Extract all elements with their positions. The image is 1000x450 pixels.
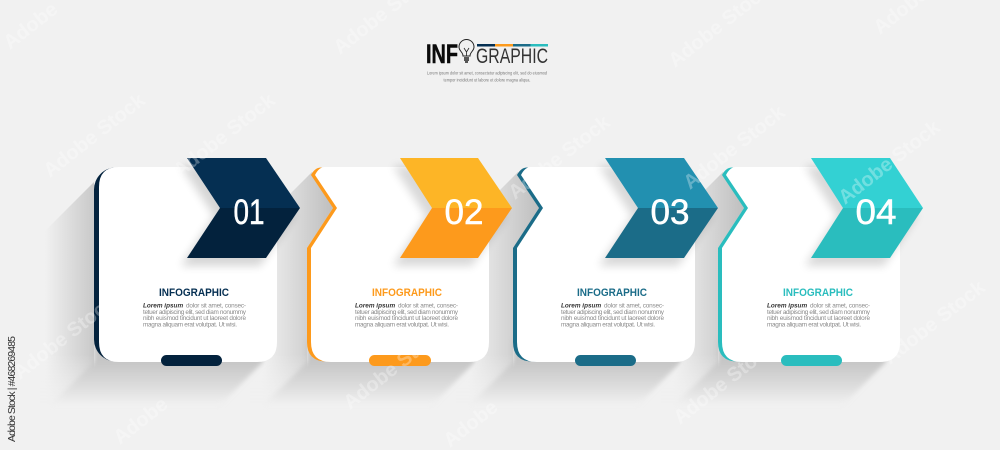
title word INF: INF <box>426 39 458 69</box>
panel: step 04 <box>718 158 923 366</box>
body text: dolor sit amet, consec- <box>398 302 458 310</box>
arrow shadow <box>393 166 506 266</box>
body text: Lorem ipsum <box>561 302 601 310</box>
body text: dolor sit amet, consec- <box>604 302 664 310</box>
body text: tetuer adipiscing elit, sed diam nonummy <box>355 309 459 316</box>
panel: step 01 <box>94 158 300 366</box>
stock watermarks: Adobe Stock <box>880 276 990 369</box>
arrow: 04 <box>811 158 923 258</box>
arrow: 01: 01 <box>234 193 264 232</box>
stock watermarks: Adobe Stock <box>680 101 790 194</box>
card accent edge <box>513 168 582 362</box>
body text: dolor sit amet, consec- <box>810 302 870 310</box>
four colour title bar <box>477 44 548 46</box>
arrow: 02 <box>400 158 512 258</box>
stock watermarks: Adobe Stock <box>835 116 945 209</box>
icon: light bulb <box>459 40 474 62</box>
subtitle <box>427 70 547 84</box>
stock watermarks: Adobe Stock <box>670 336 780 429</box>
body text: magna aliquam erat volutpat. Ut wisi. <box>561 321 655 328</box>
heading: INFOGRAPHIC <box>783 287 853 299</box>
arrow shadow <box>181 166 294 266</box>
card accent edge <box>94 168 164 362</box>
card accent edge <box>307 168 376 362</box>
subtitle: tempor incididunt ut labore et dolore magna aliqua. <box>444 78 530 84</box>
body text: dolor sit amet, consec- <box>186 302 246 310</box>
card body <box>517 167 695 362</box>
pill <box>369 355 431 366</box>
card accent edge <box>718 168 787 362</box>
card body <box>722 167 900 362</box>
stock watermarks: Adobe Stock <box>340 321 450 414</box>
body text: tetuer adipiscing elit, sed diam nonummy <box>143 309 247 316</box>
arrow: 03: 03 <box>650 193 690 232</box>
body text: nibh euismod tincidunt ut laoreet dolore <box>767 315 870 322</box>
long shadows behind the cards <box>40 172 886 405</box>
body text: Lorem ipsum <box>767 302 807 310</box>
body text <box>561 302 665 328</box>
stock watermarks: Adobe Stock <box>170 89 280 182</box>
heading: INFOGRAPHIC <box>577 287 647 299</box>
body text: nibh euismod tincidunt ut laoreet dolore <box>355 315 458 322</box>
arrow: 03 <box>605 158 718 258</box>
body text: magna aliquam erat volutpat. Ut wisi. <box>143 321 237 328</box>
heading: INFOGRAPHIC <box>372 287 442 299</box>
body text: tetuer adipiscing elit, sed diam nonummy <box>561 309 665 316</box>
pill <box>161 355 222 366</box>
body text: Lorem ipsum <box>355 302 395 310</box>
body text <box>355 302 459 328</box>
card body <box>311 167 489 362</box>
arrow shadow <box>599 166 712 266</box>
stock watermarks: Adobe Stock <box>10 291 120 384</box>
panel: step 02 <box>307 158 512 366</box>
stock watermarks: Adobe Stock <box>505 111 615 204</box>
arrow: 04: 04 <box>856 193 896 232</box>
pill <box>781 355 842 366</box>
body text <box>143 302 247 328</box>
pill <box>575 355 636 366</box>
title block <box>426 39 548 84</box>
panel: step 03 <box>513 158 718 366</box>
heading: INFOGRAPHIC <box>159 287 229 299</box>
card body <box>99 167 277 362</box>
body text: magna aliquam erat volutpat. Ut wisi. <box>355 321 449 328</box>
stock watermarks: Adobe Stock <box>40 89 150 182</box>
arrow: 01 <box>187 158 300 258</box>
body text: nibh euismod tincidunt ut laoreet dolore <box>143 315 246 322</box>
arrow: 02: 02 <box>444 193 484 232</box>
subtitle: Lorem ipsum dolor sit amet, consectetur adipiscing elit, sed do eiusmod <box>427 70 547 76</box>
body text: Lorem ipsum <box>143 302 183 310</box>
body text: tetuer adipiscing elit, sed diam nonummy <box>767 309 871 316</box>
body text: magna aliquam erat volutpat. Ut wisi. <box>767 321 861 328</box>
body text: nibh euismod tincidunt ut laoreet dolore <box>561 315 664 322</box>
arrow shadow <box>805 166 917 266</box>
title word GRAPHIC: GRAPHIC <box>476 45 548 68</box>
stock watermarks: Adobe <box>110 393 172 449</box>
body text <box>767 302 871 328</box>
stock id label: Adobe Stock | #468269485 <box>6 336 18 442</box>
